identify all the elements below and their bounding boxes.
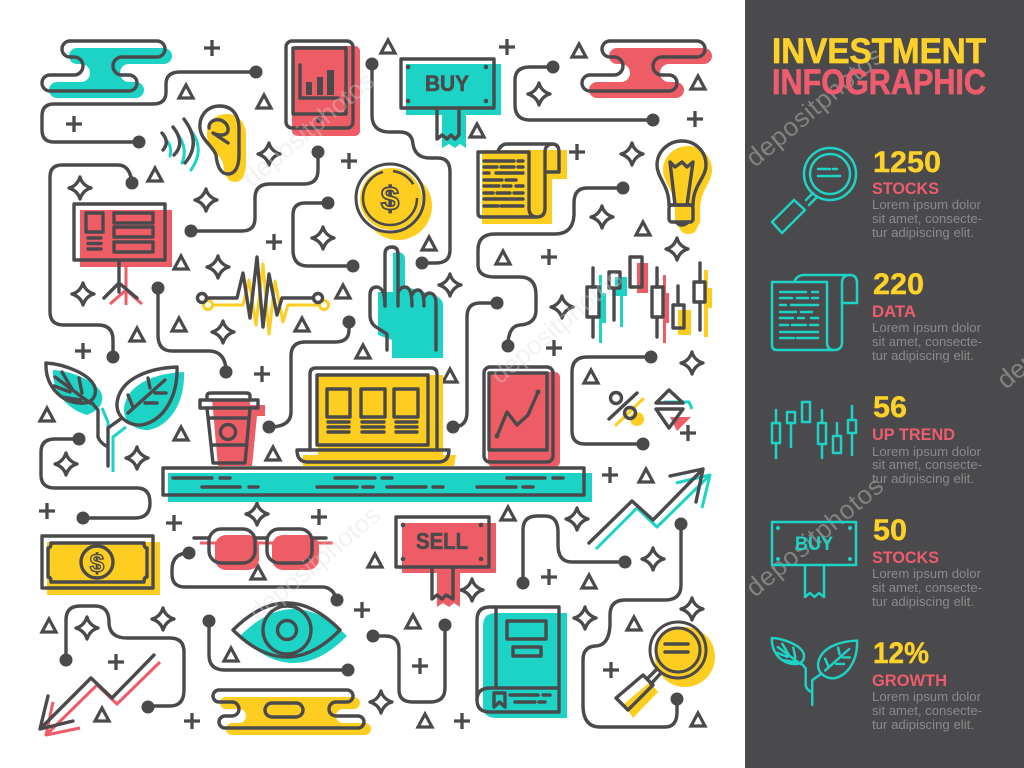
item: data 220: DATA (872, 302, 916, 321)
item: data 220: sit amet, consecte- (872, 334, 982, 349)
item: growth 12%: sit amet, consecte- (872, 703, 982, 718)
icon: magnifying glass (616, 622, 715, 718)
item: stocks 1250: tur adipiscing elit. (872, 225, 974, 240)
item: stocks 50: Lorem ipsum dolor (872, 566, 982, 581)
icon: coffee cup (200, 393, 265, 466)
icon: glasses (194, 529, 333, 570)
icon: ear with sound waves (162, 106, 246, 182)
icon: candlesticks (772, 402, 856, 458)
watermarks (237, 66, 628, 627)
item: up trend 56: UP TREND (872, 425, 955, 444)
side panel (740, 0, 1024, 768)
icon: buy sign (401, 59, 501, 148)
triangle markers (40, 40, 705, 727)
watermarks: depositphotos (485, 263, 628, 390)
icon: sell sign: SELL (416, 528, 468, 554)
item: data 220 (772, 268, 982, 363)
icon: yellow cloud (213, 690, 371, 735)
icon: pointing hand (370, 247, 443, 358)
icon: laptop (297, 368, 456, 466)
icon: dollar coin: $ (381, 180, 399, 217)
icon: tablet with bar chart (286, 41, 360, 136)
icon: newspaper (478, 144, 567, 224)
item: stocks 1250: sit amet, consecte- (872, 211, 982, 226)
icon: presentation board (74, 204, 172, 305)
icon: document (772, 275, 857, 350)
icon: teal cloud (42, 41, 172, 98)
icon: buy sign outline (772, 522, 856, 597)
icon: dollar coin (356, 164, 432, 240)
icon: candlestick chart (587, 257, 712, 343)
panel watermark: depositphotos (740, 470, 889, 603)
item: stocks 1250: Lorem ipsum dolor (872, 197, 982, 212)
icon: light bulb (657, 141, 712, 234)
icon: leaves plant (46, 363, 184, 472)
icon: buy sign: BUY (425, 71, 469, 96)
shelf (163, 468, 592, 502)
watermarks: depositphotos (237, 66, 380, 193)
item: growth 12%: tur adipiscing elit. (872, 717, 974, 732)
sparkle markers (55, 83, 703, 713)
arrow: upward trend (589, 469, 710, 549)
item: up trend 56: Lorem ipsum dolor (872, 444, 982, 459)
icon: banknote: $ (90, 548, 105, 578)
connector wires (41, 58, 688, 727)
item: data 220: tur adipiscing elit. (872, 348, 974, 363)
item: stocks 50 (772, 514, 982, 609)
item: stocks 1250: STOCKS (872, 179, 939, 198)
item: data 220: 220 (873, 268, 924, 301)
item: growth 12% (772, 637, 982, 732)
arrow: downward trend (40, 655, 160, 735)
icon: tablet with line chart (484, 367, 560, 467)
item: stocks 50: sit amet, consecte- (872, 580, 982, 595)
panel watermark (740, 40, 1024, 603)
item: growth 12%: GROWTH (872, 671, 947, 690)
item: up trend 56: tur adipiscing elit. (872, 471, 974, 486)
panel watermark: depositphotos (740, 40, 889, 173)
title: INVESTMENT (772, 32, 986, 71)
icon: pulse wave (198, 257, 328, 334)
icon: eye (233, 603, 347, 663)
item: up trend 56: sit amet, consecte- (872, 457, 982, 472)
icon: magnifier (772, 148, 856, 233)
item: stocks 50: 50 (873, 514, 907, 547)
item: growth 12%: Lorem ipsum dolor (872, 689, 982, 704)
watermarks: depositphotos (243, 500, 386, 627)
item: growth 12%: 12% (873, 637, 929, 670)
icon: buy sign outline: BUY (795, 534, 833, 555)
icon: percent and diamond (609, 390, 692, 431)
item: stocks 1250: 1250 (873, 146, 941, 179)
item: stocks 50: STOCKS (872, 548, 939, 567)
title: INFOGRAPHIC (772, 63, 986, 102)
item: up trend 56 (772, 391, 982, 486)
item: data 220: Lorem ipsum dolor (872, 320, 982, 335)
icon: red cloud (582, 41, 712, 98)
icon: book (477, 607, 567, 718)
icon: banknote (42, 536, 160, 595)
icon: sell sign (396, 517, 496, 607)
plus markers (39, 39, 703, 729)
title (772, 32, 986, 102)
item: stocks 50: tur adipiscing elit. (872, 594, 974, 609)
item: up trend 56: 56 (873, 391, 907, 424)
icon: leaves outline (772, 638, 857, 705)
item: stocks 1250 (772, 146, 982, 240)
